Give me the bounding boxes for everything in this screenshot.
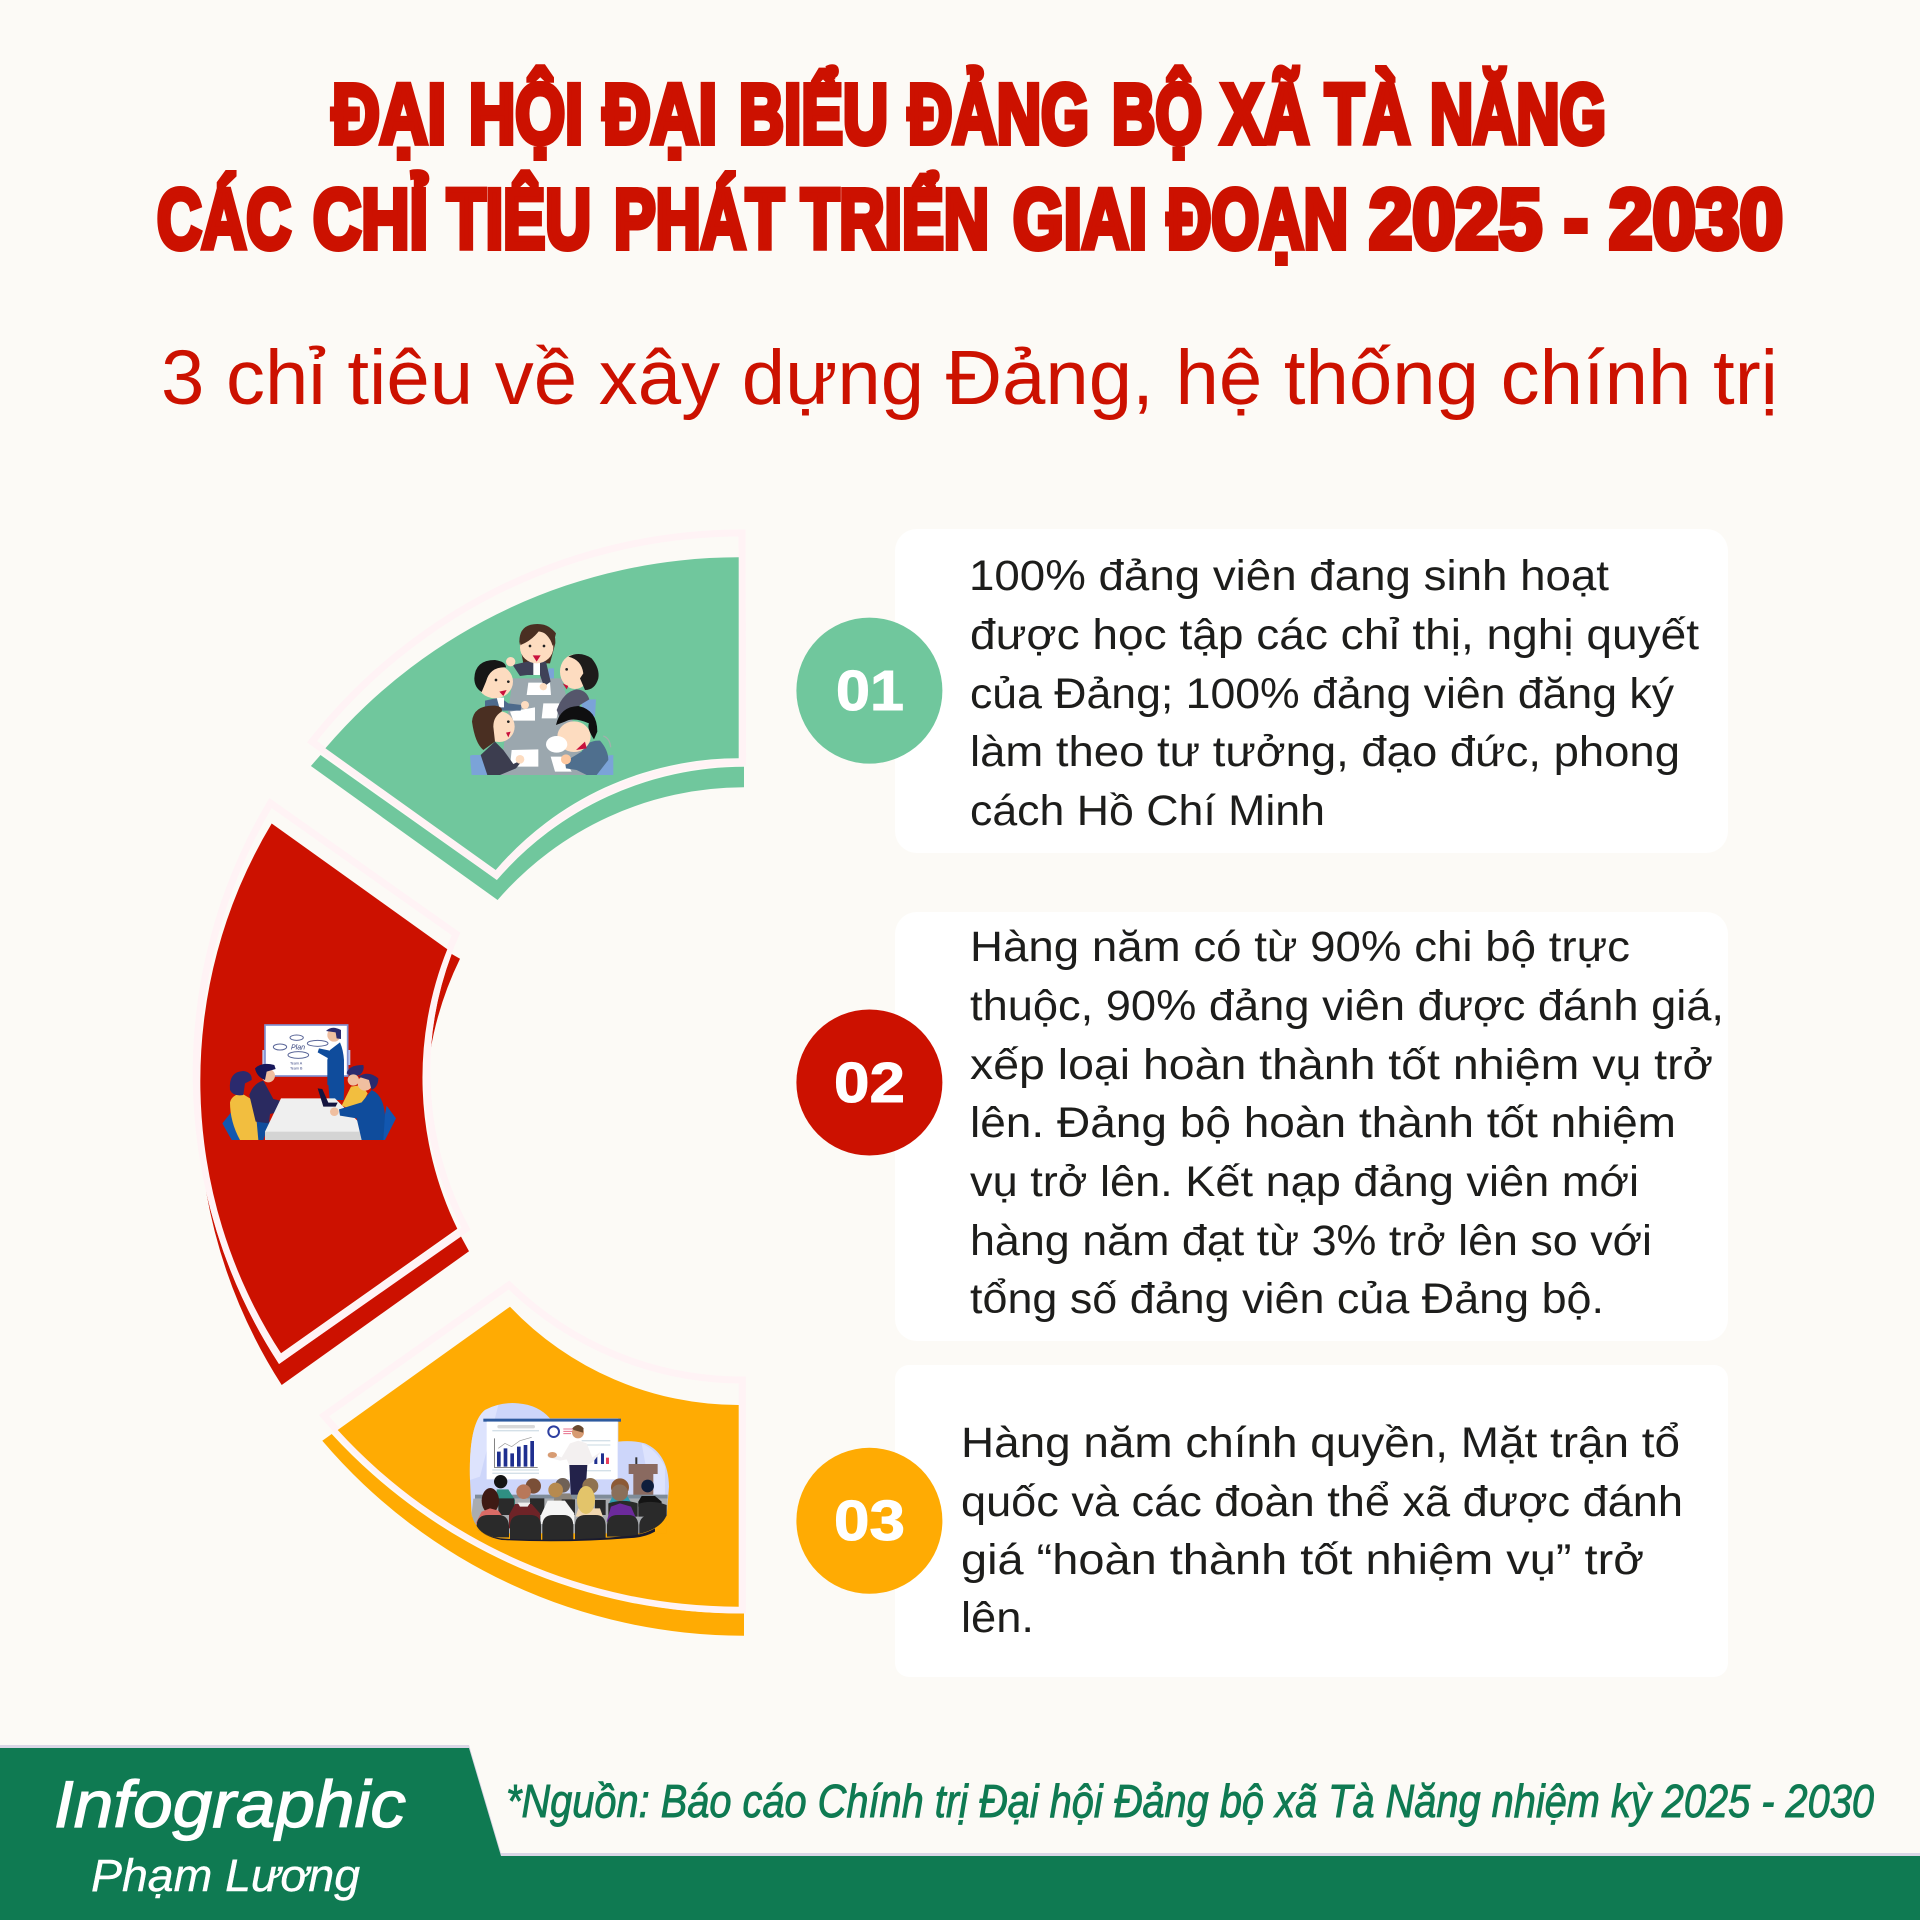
- person: lower left: [472, 706, 524, 775]
- title: ĐẠI: [332, 67, 446, 161]
- title: NĂNG: [1430, 67, 1606, 161]
- badge: 03: [796, 1448, 942, 1594]
- front row seats: [472, 1513, 667, 1541]
- text block: target 1: 100% đảng viên đang sinh hoạt: [969, 552, 1609, 600]
- person: upper left: [474, 660, 529, 711]
- icon: team meeting around table: [470, 624, 613, 775]
- footer band: [0, 1745, 1920, 1920]
- person: left woman: [230, 1071, 262, 1140]
- badge: 01: [796, 618, 942, 764]
- title: ĐẢNG: [908, 67, 1089, 161]
- icon: team planning meeting: Plan: [291, 1044, 305, 1051]
- meeting table: [265, 1098, 368, 1140]
- person: lower right, asleep: [546, 706, 611, 775]
- text block: target 3: Hàng năm chính quyền, Mặt trận tổ: [961, 1419, 1680, 1467]
- title: ĐOẠN: [1167, 172, 1348, 266]
- title: PHÁT: [614, 172, 784, 266]
- subtitle: 3 chỉ tiêu về xây dựng Đảng, hệ thống chính trị: [161, 335, 1778, 421]
- laptop: [318, 1088, 338, 1107]
- title: HỘI: [469, 67, 583, 161]
- badge: 02: 02: [834, 1051, 905, 1115]
- person: left man: [249, 1064, 300, 1140]
- chart on screen: [494, 1426, 609, 1467]
- title: GIAI: [1013, 172, 1147, 266]
- icon: presenter with audience: [470, 1403, 669, 1541]
- person: right man: [330, 1074, 385, 1140]
- title: TÀ: [1325, 67, 1410, 161]
- title: BỘ: [1112, 67, 1202, 161]
- text block: target 2: vụ trở lên. Kết nạp đảng viên mới: [970, 1158, 1639, 1206]
- panel: card 1: [895, 529, 1728, 853]
- text block: target 2: lên. Đảng bộ hoàn thành tốt nhiệm: [970, 1099, 1676, 1147]
- title: CHỈ: [313, 172, 428, 266]
- chairs: [222, 1106, 396, 1140]
- text block: target 3: quốc và các đoàn thể xã được đánh: [961, 1478, 1683, 1526]
- title: 2030: [1609, 172, 1783, 266]
- panel: card 2: [895, 912, 1728, 1341]
- presenter: [318, 1028, 344, 1100]
- podium: [629, 1464, 658, 1498]
- icon: team planning meeting: [222, 1025, 396, 1140]
- text block: target 2: thuộc, 90% đảng viên được đánh giá,: [970, 982, 1724, 1030]
- text block: target 2: hàng năm đạt từ 3% trở lên so với: [970, 1217, 1652, 1265]
- footer: author: Phạm Lương: [91, 1850, 360, 1901]
- title: -: [1564, 172, 1588, 266]
- audience: [476, 1475, 667, 1528]
- badge: 03: 03: [834, 1489, 905, 1553]
- title: TRIỂN: [801, 172, 989, 266]
- presenter: [548, 1425, 601, 1504]
- panel: orange sector: [322, 1285, 744, 1636]
- title: CÁC: [157, 172, 291, 266]
- title: [157, 67, 1783, 266]
- title: 2025: [1369, 172, 1542, 266]
- person: top: [506, 624, 556, 690]
- text block: target 1: làm theo tư tưởng, đạo đức, phong: [970, 728, 1680, 776]
- text block: target 2: xếp loại hoàn thành tốt nhiệm vụ trở: [970, 1041, 1713, 1089]
- text block: target 2: Hàng năm có từ 90% chi bộ trực: [970, 923, 1630, 971]
- title: TIÊU: [447, 172, 591, 266]
- text block: target 1: [969, 552, 1699, 835]
- panel: green sector: [311, 533, 744, 900]
- badge: 01: 01: [836, 659, 904, 723]
- badge: 02: [796, 1010, 942, 1156]
- panel: red sector: [196, 803, 469, 1385]
- title: BIỂU: [739, 67, 888, 161]
- title: ĐẠI: [603, 67, 717, 161]
- person: right woman: [342, 1065, 368, 1112]
- icon: team planning meeting: Team A: [290, 1061, 303, 1065]
- text block: target 1: cách Hồ Chí Minh: [970, 787, 1325, 835]
- footer: Infographic label: Infographic: [54, 1767, 406, 1841]
- person: upper right: [557, 654, 599, 718]
- text block: target 1: được học tập các chỉ thị, nghị quyết: [970, 611, 1699, 659]
- panel: card 3: [895, 1365, 1728, 1677]
- text block: target 1: của Đảng; 100% đảng viên đăng ký: [970, 670, 1675, 718]
- text block: target 2: tổng số đảng viên của Đảng bộ.: [970, 1275, 1604, 1323]
- title: XÃ: [1221, 67, 1309, 161]
- text block: target 3: [961, 1419, 1683, 1642]
- text block: target 2: [970, 923, 1724, 1323]
- icon: team planning meeting: Team B: [290, 1066, 303, 1070]
- text block: target 3: lên.: [961, 1594, 1034, 1642]
- text block: target 3: giá “hoàn thành tốt nhiệm vụ” trở: [961, 1536, 1644, 1584]
